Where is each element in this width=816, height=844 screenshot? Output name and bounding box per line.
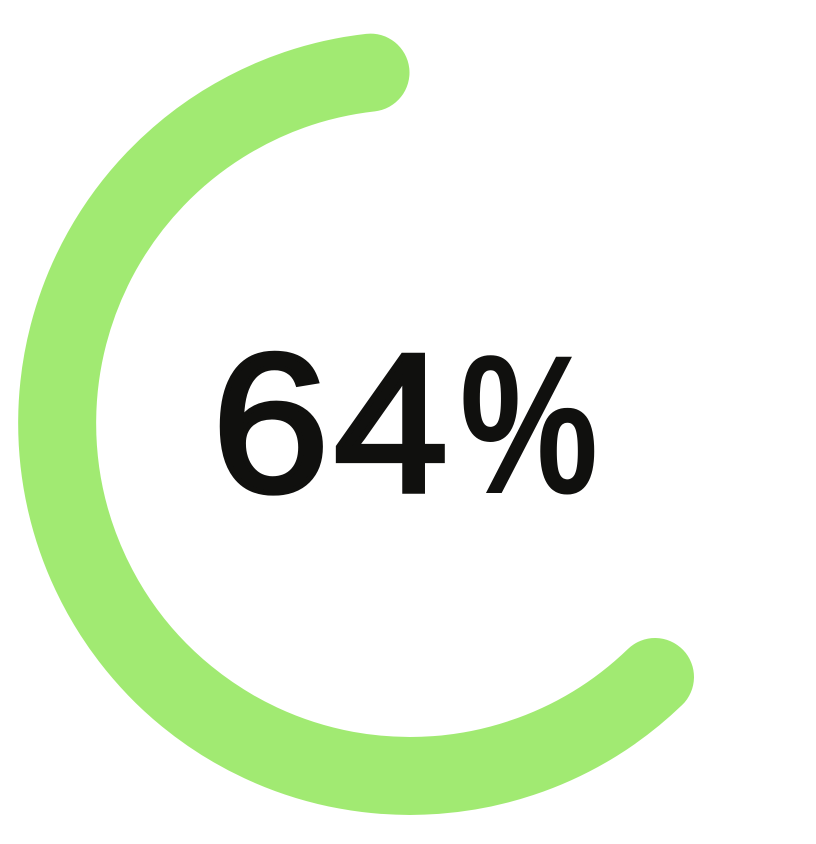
- percentage value: [212, 313, 598, 535]
- progress arc: [57, 73, 655, 776]
- percentage value: %: [460, 314, 598, 535]
- percentage value: 6: [212, 313, 329, 533]
- percentage value: 4: [334, 313, 448, 533]
